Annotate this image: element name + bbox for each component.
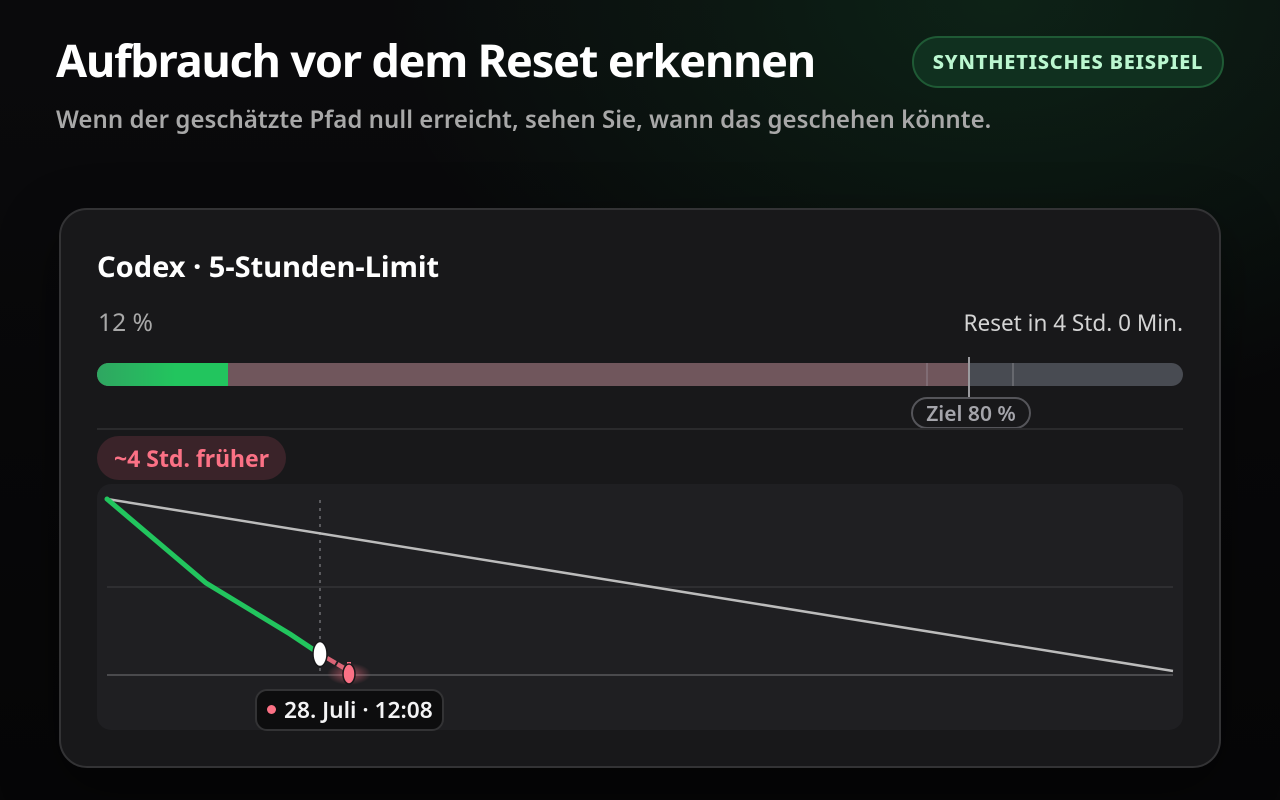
- date tooltip: [255, 689, 444, 731]
- depletion nib: [347, 662, 351, 668]
- target marker: [968, 357, 970, 398]
- early depletion pill: ~4 Std. früher: [114, 442, 269, 474]
- reference line: [107, 499, 1173, 671]
- progress bar: [97, 363, 1183, 386]
- early depletion pill: [97, 436, 286, 480]
- target label: [911, 397, 1031, 429]
- usage line: [107, 499, 320, 654]
- panel: codex limit card: [59, 208, 1221, 768]
- divider: [97, 428, 1183, 430]
- depletion glow: [327, 663, 371, 685]
- tooltip dot: [267, 705, 276, 714]
- reset time: Reset in 4 Std. 0 Min.: [964, 307, 1183, 338]
- usage percentage: 12 %: [98, 306, 153, 339]
- current usage fill: [97, 363, 228, 386]
- current point: [313, 642, 327, 666]
- badge: synthetic example: SYNTHETISCHES BEISPIEL: [933, 48, 1203, 75]
- badge: synthetic example: [912, 36, 1224, 88]
- subtitle: Wenn der geschätzte Pfad null erreicht, sehen Sie, wann das geschehen könnte.: [56, 103, 991, 136]
- projection dashes: [327, 658, 349, 671]
- tick: [926, 363, 928, 386]
- tick: [1012, 363, 1014, 386]
- title: Aufbrauch vor dem Reset erkennen: [56, 30, 815, 91]
- tooltip text: 28. Juli · 12:08: [284, 694, 433, 725]
- projected usage segment: [97, 363, 969, 386]
- depletion point: [343, 664, 355, 684]
- card heading: Codex · 5-Stunden-Limit: [97, 247, 439, 286]
- chart: burn-down: [104, 496, 1174, 685]
- target label: Ziel 80 %: [926, 400, 1016, 428]
